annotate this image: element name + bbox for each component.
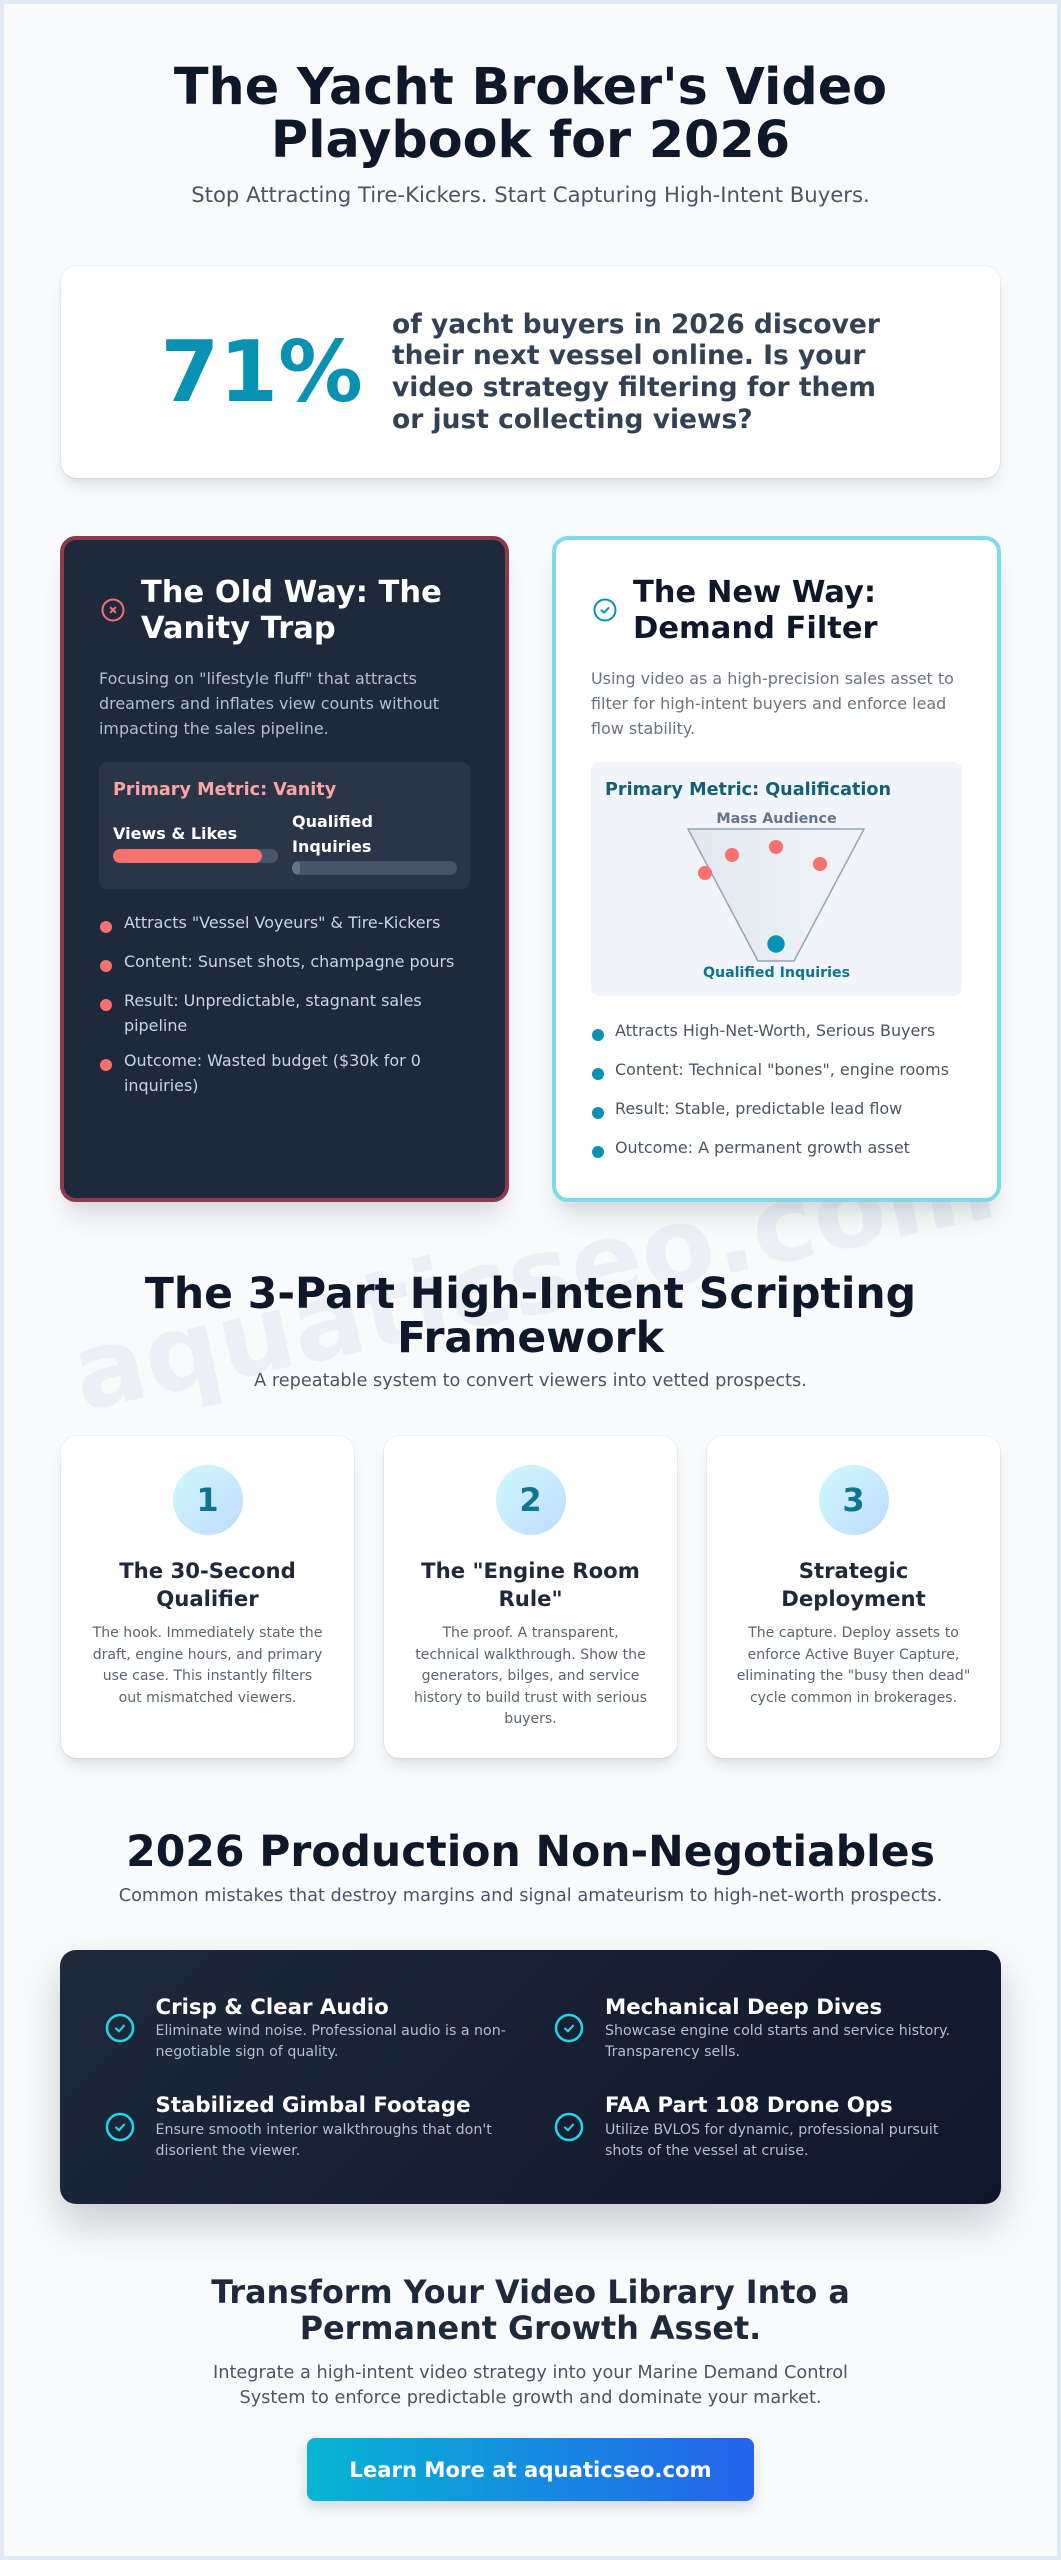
step text: [414, 1625, 647, 1727]
icon: x circle: [102, 598, 124, 622]
item text: [605, 2122, 938, 2159]
title: [174, 57, 887, 169]
item text: disorient the viewer.: [156, 2143, 300, 2159]
step number: 3: [842, 1481, 865, 1519]
item title: Mechanical Deep Dives: [605, 1995, 882, 2020]
new way description: Using video as a high-precision sales asset to: [591, 669, 954, 688]
step title: The "Engine Room: [421, 1558, 640, 1583]
icon: check circle: [594, 598, 616, 622]
old way heading: [141, 575, 442, 646]
step text: history to build trust with serious: [414, 1690, 647, 1706]
item text: [604, 2023, 950, 2060]
bar: views and likes: [113, 849, 278, 863]
step text: The proof. A transparent,: [442, 1625, 619, 1641]
label: qualified inquiries: [292, 812, 373, 856]
new way description: [591, 669, 954, 738]
framework heading: [145, 1270, 916, 1363]
bullet text: [124, 991, 422, 1035]
old way description: [99, 669, 439, 738]
item text: Transparency sells.: [605, 2044, 740, 2060]
call to action text: Integrate a high-intent video strategy into your Marine Demand Control: [213, 2363, 848, 2383]
step number: [172, 1465, 242, 1535]
step title: Strategic: [799, 1558, 908, 1583]
bullet dot: [592, 1107, 604, 1119]
call to action text: [213, 2363, 848, 2408]
stat description: or just collecting views?: [392, 404, 753, 435]
production heading: 2026 Production Non-Negotiables: [126, 1828, 935, 1876]
new way heading: [633, 575, 878, 646]
bullet dot: [592, 1146, 604, 1158]
production subtitle: Common mistakes that destroy margins and signal amateurism to high-net-worth prospects.: [119, 1886, 942, 1906]
old way description: impacting the sales pipeline.: [99, 719, 329, 738]
framework heading: The 3-Part High-Intent Scripting: [145, 1270, 916, 1319]
step text: The capture. Deploy assets to: [748, 1625, 959, 1641]
old way metric panel: [99, 762, 470, 889]
bullet text: Outcome: A permanent growth asset: [615, 1138, 910, 1157]
item title: Stabilized Gimbal Footage: [156, 2093, 471, 2118]
icon: check: [554, 2014, 584, 2042]
watermark: aquaticseo.com: [62, 1120, 1005, 1435]
label: views and likes: Views & Likes: [113, 824, 237, 842]
title: Playbook for 2026: [271, 110, 790, 169]
step text: use case. This instantly filters: [103, 1668, 312, 1684]
new way metric panel: [591, 762, 962, 996]
step text: enforce Active Buyer Capture,: [748, 1647, 959, 1663]
old way heading: Vanity Trap: [141, 610, 336, 646]
funnel chart: Mass Audience: [716, 811, 837, 827]
call to action text: System to enforce predictable growth and dominate your market.: [239, 2388, 822, 2408]
panel: step 3: [707, 1436, 1000, 1758]
bar: qualified inquiries: [292, 861, 457, 875]
panel: the old way: [60, 536, 509, 1202]
button: [307, 2438, 754, 2501]
label: qualified inquiries: Qualified: [292, 812, 373, 830]
step text: out mismatched viewers.: [119, 1690, 296, 1706]
item title: Crisp & Clear Audio: [156, 1995, 389, 2020]
subtitle: Stop Attracting Tire-Kickers. Start Capturing High-Intent Buyers.: [191, 182, 870, 206]
bullet text: Attracts "Vessel Voyeurs" & Tire-Kickers: [124, 913, 440, 932]
funnel chart: Qualified Inquiries: [703, 965, 850, 981]
framework subtitle: A repeatable system to convert viewers into vetted prospects.: [254, 1371, 807, 1391]
stat description: of yacht buyers in 2026 discover: [392, 309, 880, 340]
title: The Yacht Broker's Video: [174, 57, 887, 116]
step text: generators, bilges, and service: [422, 1668, 639, 1684]
panel: non-negotiables: [60, 1950, 1001, 2204]
new way description: filter for high-intent buyers and enforce lead: [591, 694, 946, 713]
item text: Ensure smooth interior walkthroughs that don't: [156, 2122, 492, 2138]
icon: check: [106, 2014, 134, 2042]
panel: step 1: [61, 1436, 354, 1758]
bullet dot: [100, 960, 112, 972]
old way bullet list: [100, 913, 454, 1095]
bullet dot: [592, 1029, 604, 1041]
step text: cycle common in brokerages.: [750, 1690, 957, 1706]
funnel chart: [686, 811, 866, 981]
step number: 1: [196, 1481, 219, 1519]
new way bullet list: [592, 1021, 949, 1158]
metric title: Primary Metric: Vanity: [113, 780, 336, 800]
metric title: Primary Metric: Qualification: [605, 780, 891, 800]
step text: [92, 1625, 322, 1706]
call to action heading: Transform Your Video Library Into a: [211, 2274, 850, 2311]
step title: The 30-Second: [119, 1558, 296, 1583]
item text: Utilize BVLOS for dynamic, professional pursuit: [605, 2122, 938, 2138]
step title: Rule": [498, 1586, 563, 1611]
panel: step 2: [384, 1436, 677, 1758]
step text: buyers.: [504, 1711, 557, 1727]
old way heading: The Old Way: The: [141, 575, 442, 610]
step text: The hook. Immediately state the: [93, 1625, 322, 1641]
icon: check: [554, 2112, 584, 2142]
step title: [421, 1558, 640, 1611]
bullet text: Outcome: Wasted budget ($30k for 0: [124, 1051, 421, 1070]
panel: the new way: [552, 536, 1001, 1202]
step number: 2: [519, 1481, 542, 1519]
new way heading: Demand Filter: [633, 610, 878, 646]
call to action heading: Permanent Growth Asset.: [300, 2310, 761, 2346]
call to action heading: [211, 2274, 850, 2346]
step title: [119, 1558, 296, 1611]
bullet text: Attracts High-Net-Worth, Serious Buyers: [615, 1021, 935, 1040]
step title: Deployment: [781, 1586, 926, 1611]
old way description: dreamers and inflates view counts without: [99, 694, 439, 713]
bullet dot: [592, 1068, 604, 1080]
old way description: Focusing on "lifestyle fluff" that attracts: [99, 669, 417, 688]
new way heading: The New Way:: [633, 575, 876, 610]
bullet dot: [100, 921, 112, 933]
stat description: their next vessel online. Is your: [392, 340, 865, 371]
item text: Eliminate wind noise. Professional audio is a non-: [156, 2023, 506, 2039]
item text: shots of the vessel at cruise.: [605, 2143, 809, 2159]
big stat number: 71%: [160, 323, 363, 421]
bullet text: Result: Stable, predictable lead flow: [615, 1099, 902, 1118]
item text: [156, 2122, 492, 2159]
bullet dot: [100, 999, 112, 1011]
item title: FAA Part 108 Drone Ops: [605, 2093, 893, 2118]
step text: technical walkthrough. Show the: [415, 1647, 646, 1663]
stat description: [392, 309, 880, 435]
step number: [496, 1465, 566, 1535]
bullet text: Content: Sunset shots, champagne pours: [124, 952, 454, 971]
item text: Showcase engine cold starts and service history.: [605, 2023, 950, 2039]
step number: [818, 1465, 888, 1535]
step title: [781, 1558, 926, 1611]
item text: [156, 2023, 506, 2060]
item text: negotiable sign of quality.: [156, 2044, 338, 2060]
label: qualified inquiries: Inquiries: [292, 836, 371, 856]
panel: 71% stat: [61, 266, 1000, 478]
step text: [737, 1625, 970, 1706]
bullet dot: [100, 1059, 112, 1071]
button: Learn More at aquaticseo.com: [349, 2457, 712, 2482]
step text: draft, engine hours, and primary: [93, 1647, 322, 1663]
icon: check: [106, 2112, 134, 2142]
bullet text: Content: Technical "bones", engine rooms: [615, 1060, 949, 1079]
step text: eliminating the "busy then dead": [737, 1668, 970, 1684]
new way description: flow stability.: [591, 719, 695, 738]
stat description: video strategy filtering for them: [392, 372, 876, 403]
bullet text: pipeline: [124, 1016, 187, 1035]
bullet text: [124, 1051, 421, 1095]
framework heading: Framework: [397, 1314, 664, 1363]
step title: Qualifier: [156, 1586, 259, 1611]
bullet text: inquiries): [124, 1076, 198, 1095]
bullet text: Result: Unpredictable, stagnant sales: [124, 991, 422, 1010]
